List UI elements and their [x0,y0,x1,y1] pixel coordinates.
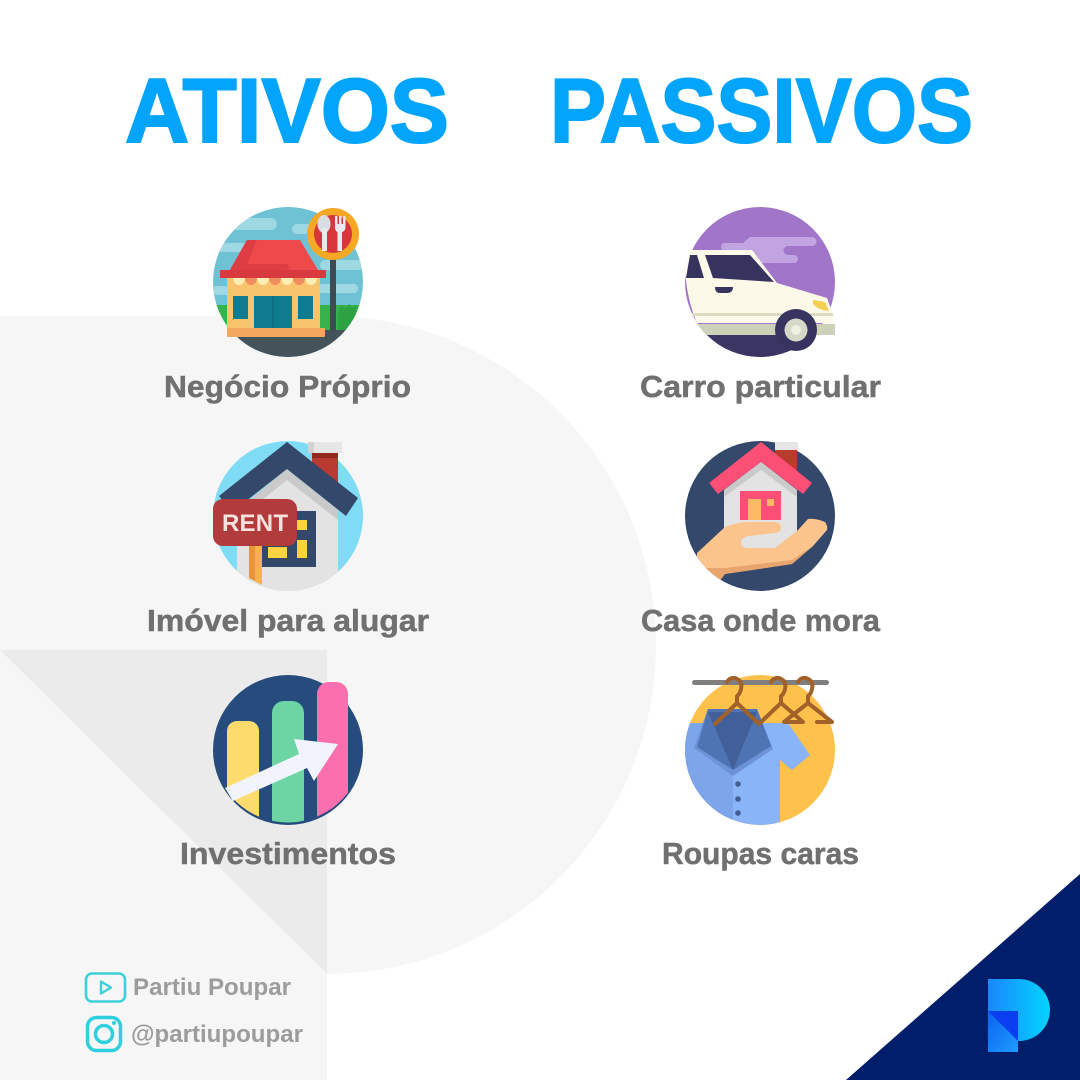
label: investimentos: Investimentos [180,836,396,871]
icon: house for rent [213,441,363,600]
icon: house on hand [685,441,835,591]
label: casa onde mora: Casa onde mora [641,603,881,638]
icon: investment chart [213,675,363,834]
icon: restaurant shop [213,207,365,357]
label: imovel para alugar: Imóvel para alugar [147,603,429,638]
label: carro particular: Carro particular [640,369,881,404]
icon: house for rent: RENT [222,510,288,537]
label: negocio proprio: Negócio Próprio [164,369,411,404]
corner triangle with logo [846,874,1080,1080]
icon: youtube [86,974,125,1002]
heading: passivos: PASSIVOS [550,61,973,162]
icon: car [685,207,835,357]
text: youtube channel: Partiu Poupar [133,974,291,1001]
icon: clothes on rack [685,675,835,830]
heading: ativos: ATIVOS [125,61,449,162]
label: roupas caras: Roupas caras [662,836,859,871]
icon: instagram [88,1018,120,1050]
text: instagram handle: @partiupoupar [131,1021,303,1048]
background shapes [0,316,656,1080]
